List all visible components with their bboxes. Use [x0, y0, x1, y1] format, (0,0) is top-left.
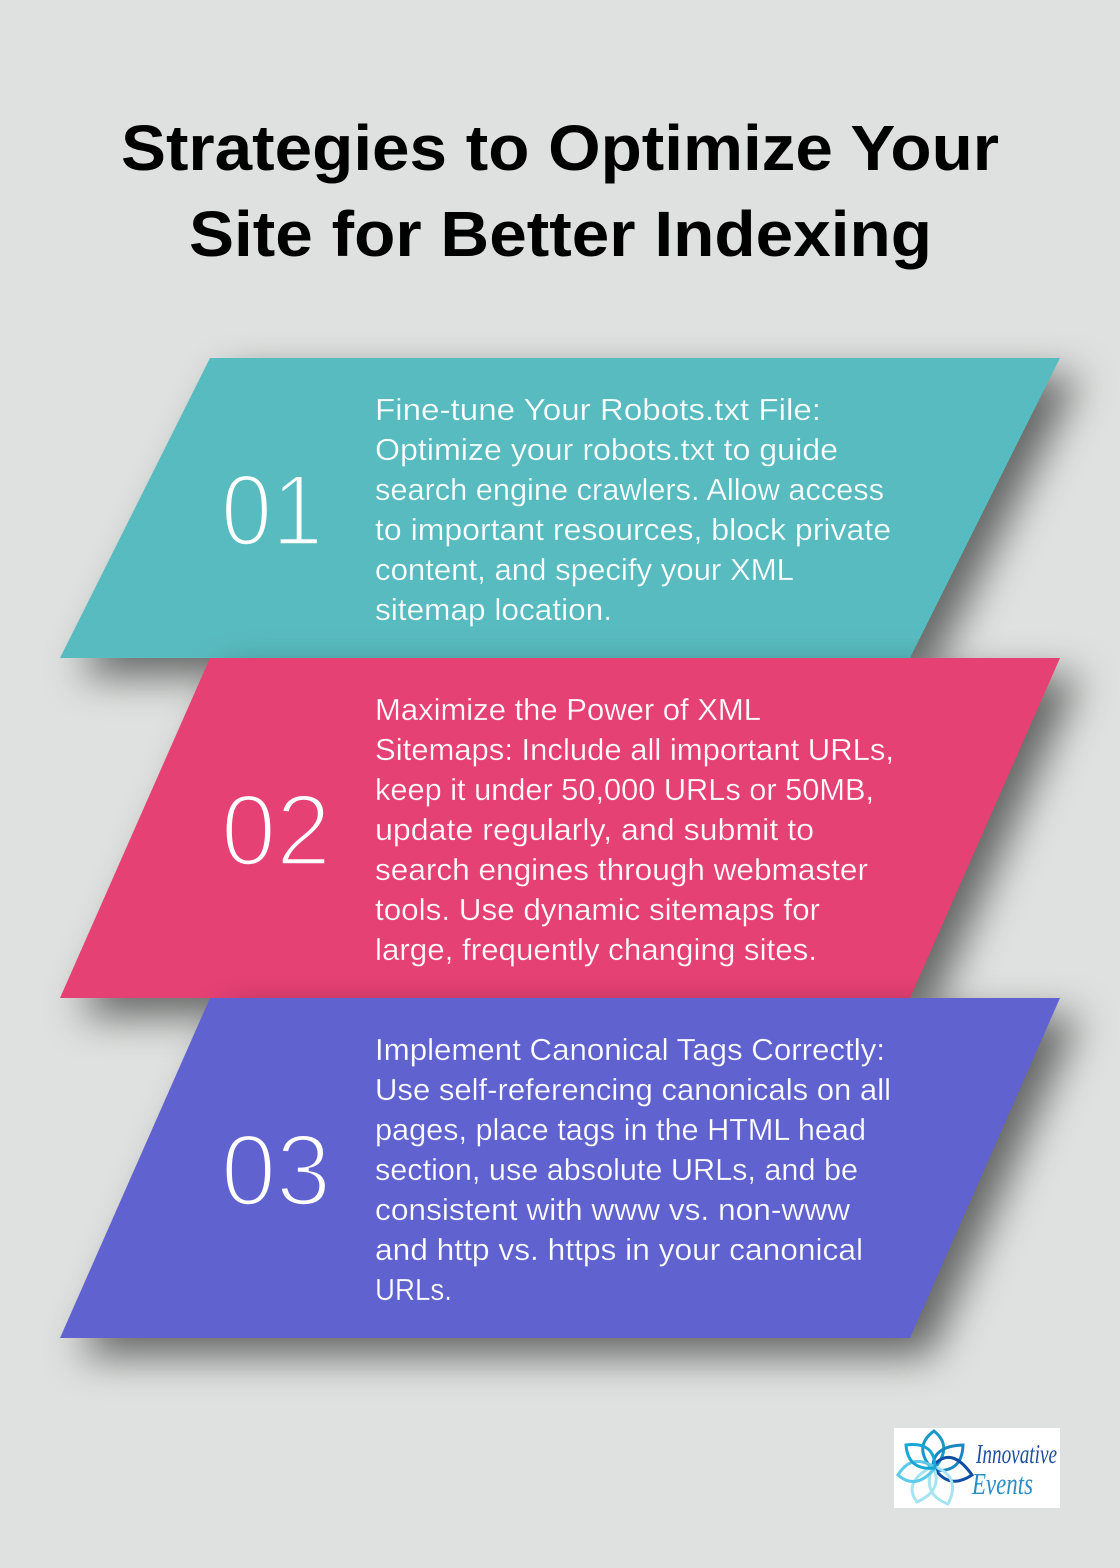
title: Strategies to Optimize Your: [121, 112, 999, 184]
icon: seven-petal flower: [898, 1431, 972, 1504]
text block: robots.txt tip: search engine crawlers. Allow access: [375, 473, 884, 507]
text block: robots.txt tip: Fine-tune Your Robots.txt File:: [375, 393, 821, 427]
text block: robots.txt tip: content, and specify your XML: [375, 553, 794, 587]
title: Site for Better Indexing: [189, 198, 932, 270]
step number 03: 03: [221, 1115, 331, 1227]
text block: XML sitemap tip: keep it under 50,000 URLs or 50MB,: [375, 773, 874, 807]
text block: canonical tags tip: section, use absolute URLs, and be: [375, 1153, 858, 1187]
text block: canonical tags tip: Use self-referencing canonicals on all: [375, 1073, 891, 1107]
text block: canonical tags tip: consistent with www vs. non-www: [375, 1193, 851, 1227]
text block: canonical tags tip: URLs.: [375, 1273, 452, 1307]
logo: Innovative Events: [894, 1428, 1060, 1508]
text block: XML sitemap tip: Maximize the Power of XML: [375, 693, 761, 727]
text block: robots.txt tip: to important resources, block private: [375, 513, 891, 547]
panel: step 3 canonical tags: [60, 998, 1060, 1338]
card shape: purple parallelogram: [60, 998, 1060, 1338]
text block: XML sitemap tip: Sitemaps: Include all important URLs,: [375, 733, 894, 767]
text block: robots.txt tip: Optimize your robots.txt to guide: [375, 433, 838, 467]
step number 01: 01: [221, 455, 323, 567]
card shape: teal parallelogram: [60, 358, 1060, 658]
text block: robots.txt tip: [375, 393, 891, 627]
text block: XML sitemap tip: search engines through webmaster: [375, 853, 868, 887]
logo wordmark: Innovative: [975, 1439, 1057, 1469]
text block: XML sitemap tip: tools. Use dynamic sitemaps for: [375, 893, 820, 927]
panel: step 2 XML sitemaps: [60, 658, 1060, 998]
text block: XML sitemap tip: [375, 693, 894, 967]
text block: canonical tags tip: Implement Canonical Tags Correctly:: [375, 1033, 885, 1067]
step number 02: 02: [221, 775, 331, 887]
title: [121, 112, 999, 270]
text block: canonical tags tip: and http vs. https in your canonical: [375, 1233, 863, 1267]
text block: XML sitemap tip: update regularly, and submit to: [375, 813, 814, 847]
text block: canonical tags tip: [375, 1033, 891, 1307]
logo wordmark: Events: [971, 1466, 1033, 1501]
card shape: pink parallelogram: [60, 658, 1060, 998]
text block: robots.txt tip: sitemap location.: [375, 593, 612, 627]
panel: step 1 robots.txt: [60, 358, 1060, 658]
text block: XML sitemap tip: large, frequently changing sites.: [375, 933, 817, 967]
text block: canonical tags tip: pages, place tags in the HTML head: [375, 1113, 866, 1147]
logo wordmark: [971, 1439, 1057, 1501]
